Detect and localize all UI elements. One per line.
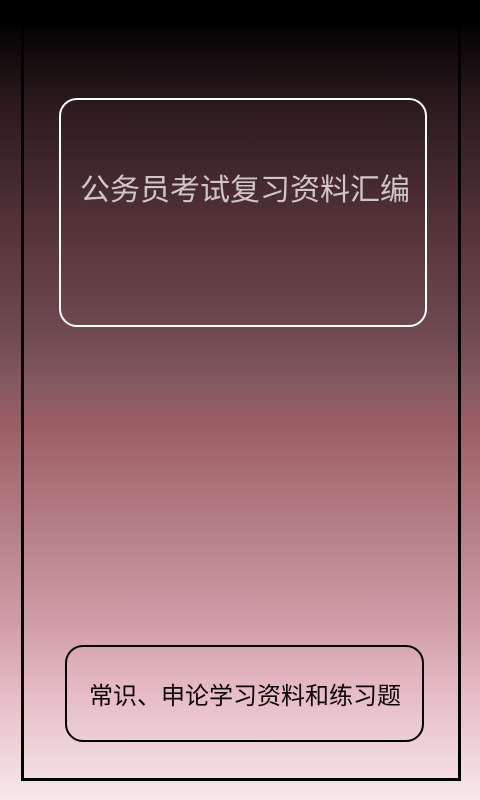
- title: 公务员考试复习资料汇编: [80, 174, 410, 207]
- panel: subtitle box: [65, 645, 424, 742]
- panel: title box: [59, 98, 427, 327]
- subtitle: 常识、申论学习资料和练习题: [89, 683, 401, 710]
